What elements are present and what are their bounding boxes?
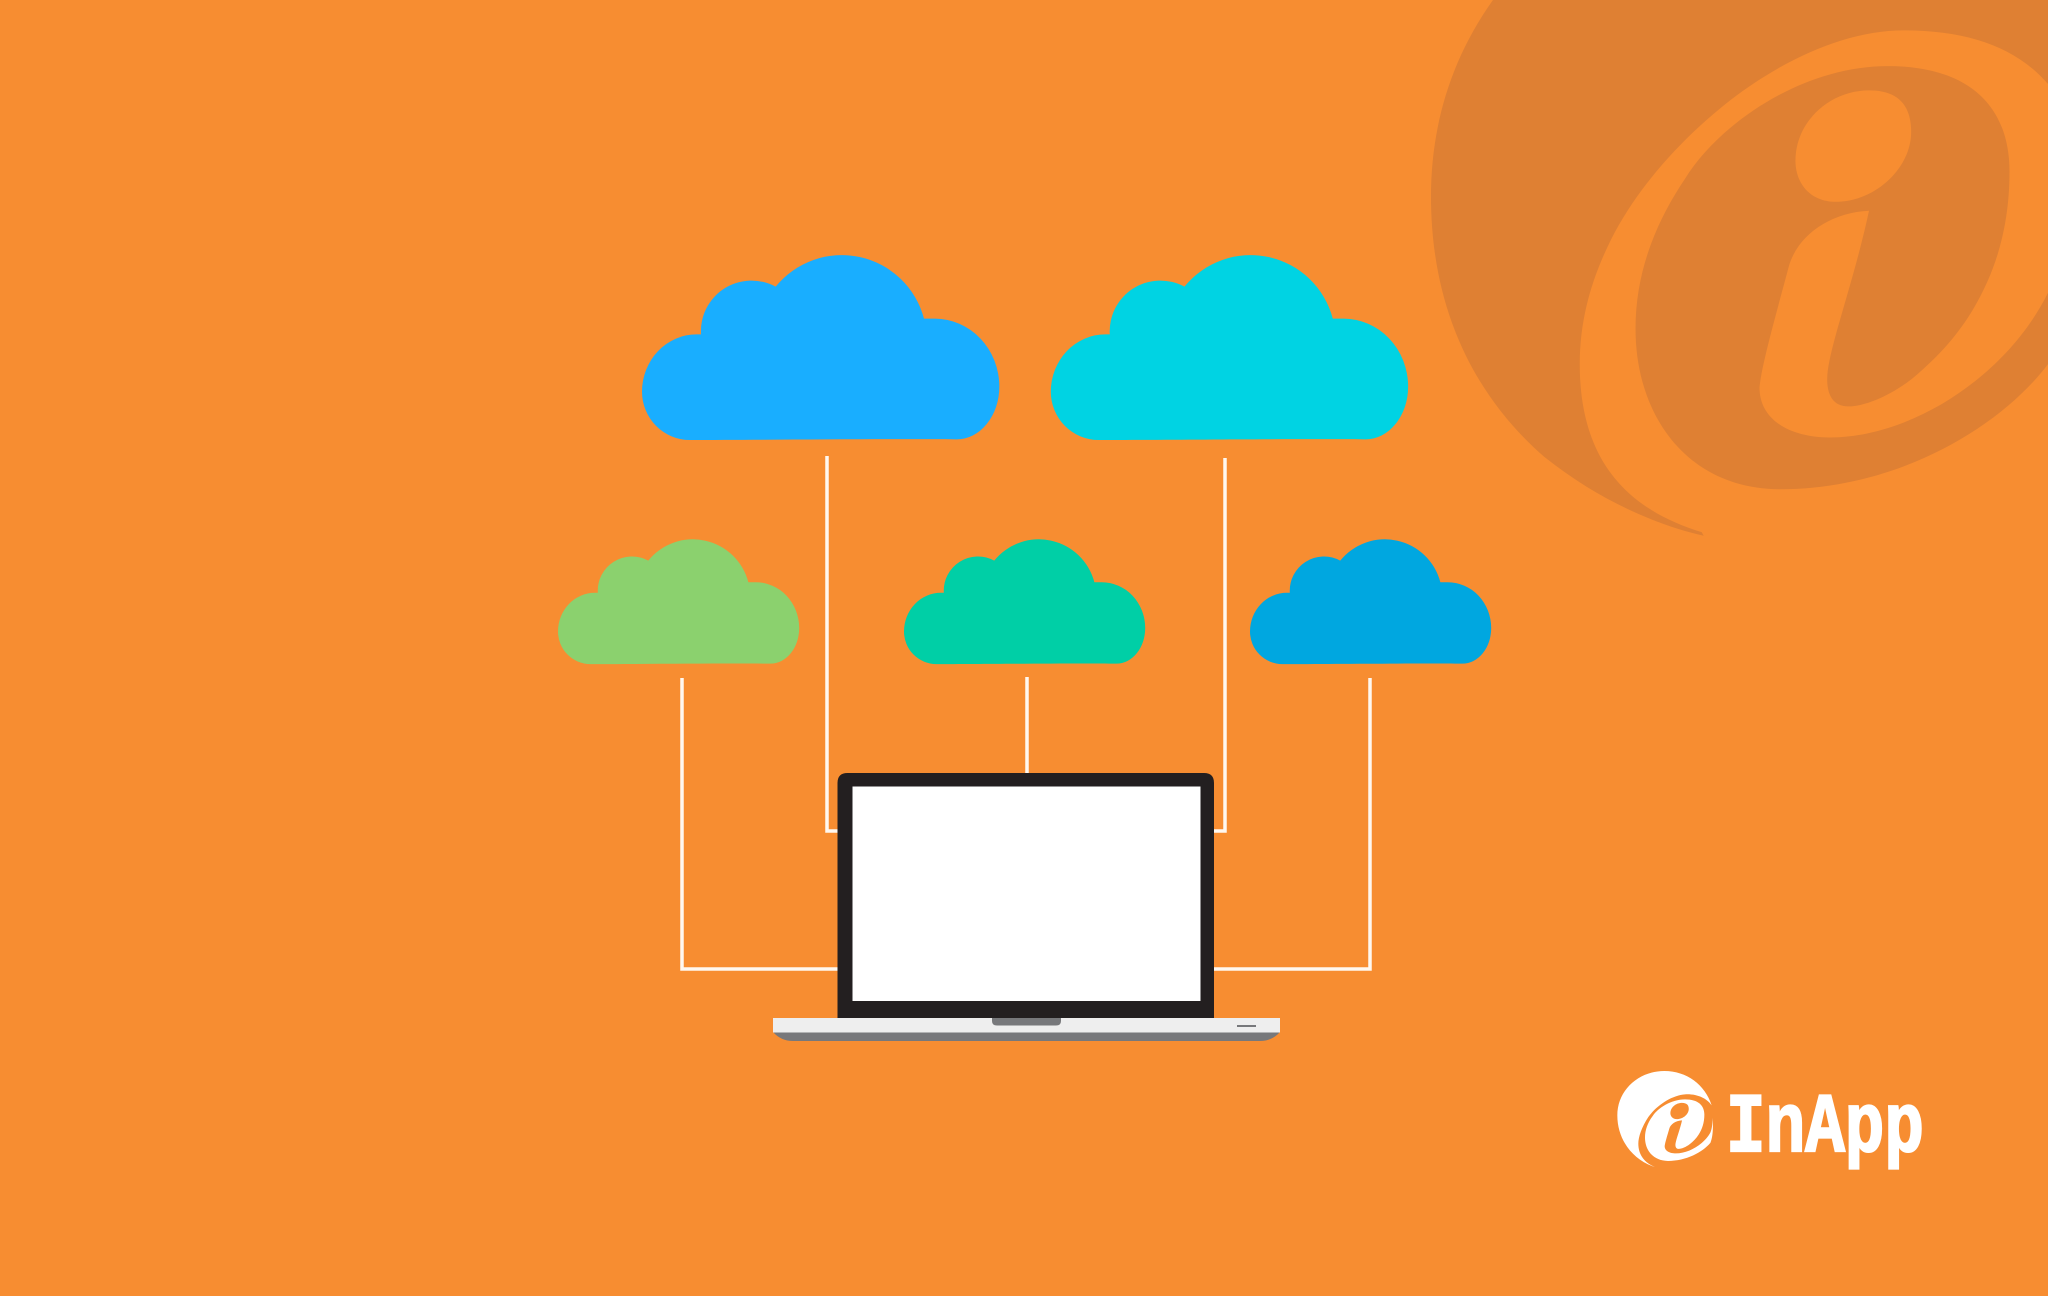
connector: teal cloud to laptop	[1025, 677, 1029, 775]
icon: large blue cloud	[642, 255, 999, 440]
icon: laptop	[773, 773, 1280, 1041]
connector: large cyan cloud to laptop	[1212, 458, 1225, 831]
logo disc crescent	[1617, 1071, 1712, 1167]
connector lines	[682, 456, 1370, 969]
laptop base	[773, 1018, 1280, 1032]
icon: small blue cloud	[1250, 539, 1491, 664]
logo wordmark: InApp	[1726, 1082, 1924, 1177]
logo: InApp	[1617, 1071, 1924, 1177]
laptop indicator light	[1237, 1025, 1256, 1027]
laptop screen	[852, 786, 1200, 1001]
icon: small green cloud	[558, 539, 799, 664]
connector: large blue cloud to laptop	[827, 456, 840, 831]
laptop base shadow	[773, 1032, 1280, 1041]
logo inner i	[1645, 1099, 1713, 1161]
icon: large cyan cloud	[1051, 255, 1408, 440]
laptop bezel	[838, 773, 1214, 1019]
icon: small teal cloud	[904, 539, 1145, 664]
watermark: large InApp i symbol	[1431, 0, 2048, 536]
laptop trackpad notch	[992, 1018, 1061, 1026]
connector: green cloud to laptop	[682, 678, 840, 969]
connector: small blue cloud to laptop	[1212, 678, 1370, 969]
